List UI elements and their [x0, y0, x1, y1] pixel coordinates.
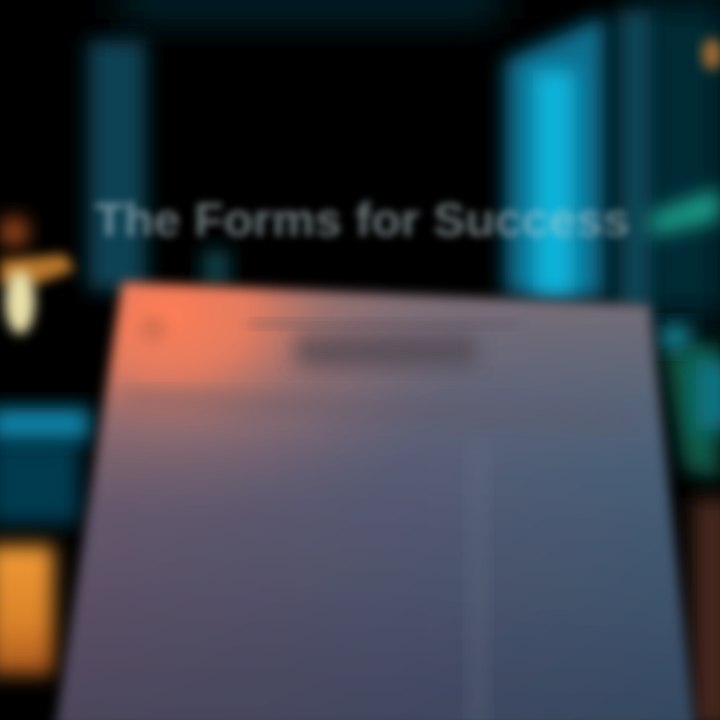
background room [0, 0, 720, 524]
glowing cyan column [505, 15, 605, 300]
orange lamp bottom left [0, 545, 54, 675]
form corner mark [139, 316, 167, 342]
figure light at left [0, 217, 75, 334]
title: The Forms for Success [94, 193, 630, 246]
panel: tax form [55, 282, 695, 720]
cyan horizontal bar [0, 408, 90, 440]
form column divider [470, 440, 486, 720]
form heading [296, 336, 476, 366]
glowing teal strip [650, 188, 720, 236]
orange light top right [702, 38, 720, 70]
form rule [125, 396, 640, 424]
green and brown right edge [660, 325, 720, 720]
